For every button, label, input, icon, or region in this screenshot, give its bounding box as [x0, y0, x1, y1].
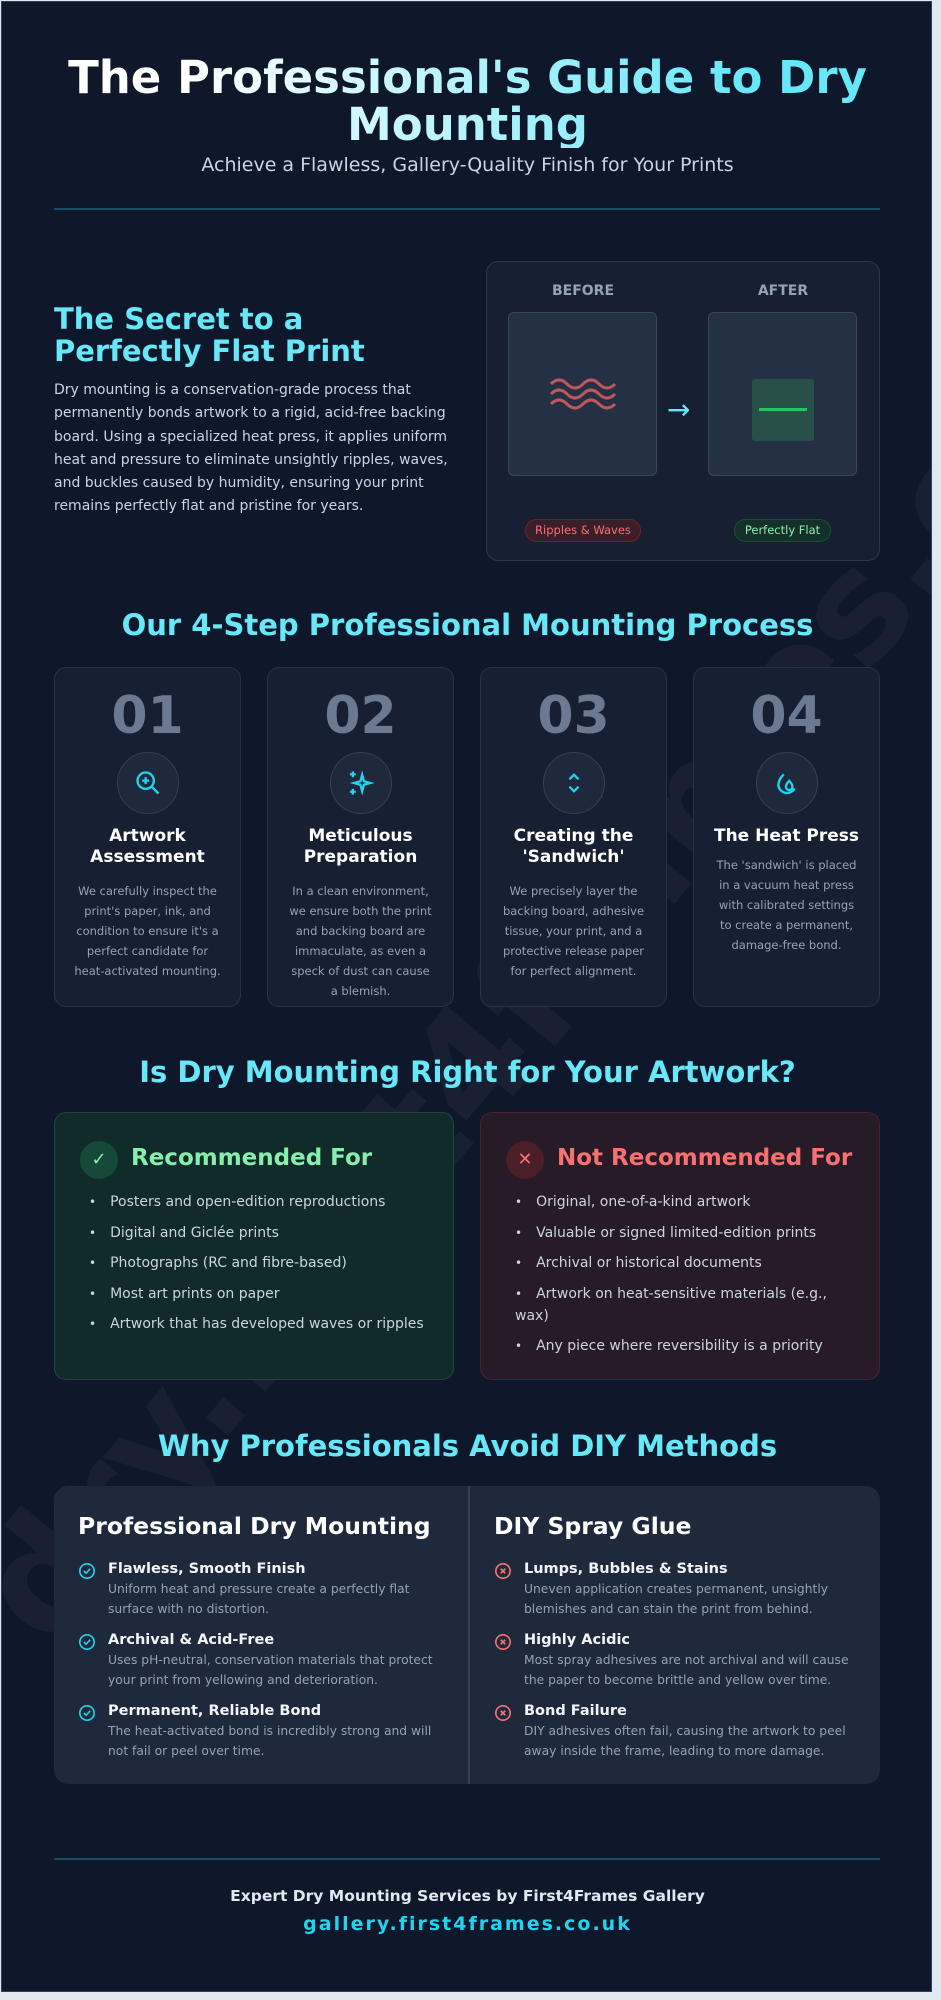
item: [495, 1632, 849, 1687]
intro paragraph: Dry mounting is a conservation-grade process that permanently bonds artwork to a rigid, acid-free backing board. Using a specialized heat press, it applies uniform heat and pressure to eliminate unsightly ripples, waves, and buckles caused by humidity, ensuring your print remains perfectly flat and pristine for years.: [54, 382, 448, 514]
heading: right for artwork: Is Dry Mounting Right for Your Artwork?: [139, 1055, 796, 1089]
step 3: Creating the: [514, 826, 633, 846]
pill before: Ripples & Waves: [535, 523, 631, 537]
title: The Professional's Guide to Dry: [68, 51, 867, 104]
list: Valuable or signed limited-edition prints: [536, 1224, 816, 1240]
panel: not recommended: [480, 1112, 880, 1380]
step 1: We carefully inspect the print's paper, ink, and condition to ensure it's a perfect candidate for heat-activated mounting.: [74, 884, 221, 978]
footer url: gallery.first4frames.co.uk: [303, 1913, 632, 1935]
icon: check: ✓: [91, 1149, 107, 1170]
step 4: The Heat Press: [714, 826, 859, 846]
icon: check: [80, 1141, 118, 1179]
title: Mounting: [347, 98, 588, 151]
heading: Recommended For: [131, 1145, 372, 1171]
step 3: [480, 667, 667, 1007]
icon: cross: [506, 1141, 544, 1179]
step 1: Artwork: [109, 826, 186, 846]
heading: secret: Perfectly Flat Print: [54, 334, 365, 368]
list: Digital and Giclée prints: [110, 1224, 279, 1240]
item: Most spray adhesives are not archival and will cause the paper to become brittle and yellow over time.: [524, 1653, 849, 1687]
step 3: We precisely layer the backing board, adhesive tissue, your print, and a protective release paper for perfect alignment.: [503, 884, 644, 978]
before print: [508, 312, 657, 476]
subtitle: Achieve a Flawless, Gallery-Quality Finish for Your Prints: [201, 154, 734, 176]
list: Artwork on heat-sensitive materials (e.g., wax): [515, 1286, 827, 1324]
step 2: 02: [324, 686, 397, 746]
item: DIY adhesives often fail, causing the artwork to peel away inside the frame, leading to more damage.: [524, 1724, 846, 1758]
item: [79, 1561, 410, 1616]
column: professional: [78, 1512, 433, 1758]
title: [2, 54, 933, 148]
icon: cross: ✕: [517, 1149, 533, 1170]
before/after panel: [486, 261, 880, 561]
item: The heat-activated bond is incredibly strong and will not fail or peel over time.: [108, 1724, 431, 1758]
list: Artwork that has developed waves or ripples: [110, 1316, 424, 1332]
item: Flawless, Smooth Finish: [108, 1561, 306, 1577]
step 1: Assessment: [90, 847, 205, 867]
item: Permanent, Reliable Bond: [108, 1703, 321, 1719]
list: Archival or historical documents: [536, 1255, 762, 1271]
column: DIY: DIY Spray Glue: [494, 1512, 691, 1540]
step 1: [54, 667, 241, 1007]
list: Any piece where reversibility is a priority: [536, 1338, 823, 1354]
item: Uses pH-neutral, conservation materials that protect your print from yellowing and deterioration.: [108, 1653, 433, 1687]
step 4: The 'sandwich' is placed in a vacuum heat press with calibrated settings to create a permanent, damage-free bond.: [717, 858, 856, 952]
heading: secret: The Secret to a: [54, 302, 303, 336]
step 2: Meticulous: [308, 826, 413, 846]
pill before: [525, 519, 641, 542]
step 1: 01: [111, 686, 184, 746]
panel: recommended: [54, 1112, 454, 1380]
item: Lumps, Bubbles & Stains: [524, 1561, 728, 1577]
list: Most art prints on paper: [110, 1286, 279, 1302]
step 2: Preparation: [304, 847, 417, 867]
heading: avoid DIY: Why Professionals Avoid DIY Methods: [158, 1429, 777, 1463]
item: [495, 1561, 828, 1616]
after print: [708, 312, 857, 476]
pill after: Perfectly Flat: [745, 523, 820, 537]
heading: process: Our 4-Step Professional Mounting Process: [122, 608, 813, 642]
item: Uniform heat and pressure create a perfectly flat surface with no distortion.: [108, 1582, 409, 1616]
item: [79, 1632, 433, 1687]
item: Bond Failure: [524, 1703, 627, 1719]
step 2: In a clean environment, we ensure both the print and backing board are immaculate, as even a speck of dust can cause a blemish.: [289, 884, 432, 998]
column: DIY: [494, 1512, 849, 1758]
step 3: 03: [537, 686, 610, 746]
list: Original, one-of-a-kind artwork: [536, 1194, 750, 1210]
column: professional: Professional Dry Mounting: [78, 1512, 431, 1540]
item: [79, 1703, 431, 1758]
pill after: [734, 519, 831, 542]
list: [90, 1194, 424, 1332]
list: Photographs (RC and fibre-based): [110, 1255, 347, 1271]
after label: AFTER: [758, 283, 808, 299]
heading: Not Recommended For: [557, 1145, 852, 1171]
item: Uneven application creates permanent, unsightly blemishes and can stain the print from behind.: [524, 1582, 828, 1616]
step 4: 04: [750, 686, 823, 746]
before label: BEFORE: [552, 283, 614, 299]
heading: secret: [54, 302, 365, 368]
list: Posters and open-edition reproductions: [110, 1194, 385, 1210]
footer text: Expert Dry Mounting Services by First4Frames Gallery: [230, 1887, 705, 1905]
item: Archival & Acid-Free: [108, 1632, 274, 1648]
list: [515, 1194, 827, 1354]
comparison panel: [54, 1486, 880, 1784]
arrow: →: [667, 393, 690, 426]
item: Highly Acidic: [524, 1632, 630, 1648]
step 2: [267, 667, 454, 1007]
step 3: 'Sandwich': [522, 847, 625, 867]
item: [495, 1703, 846, 1758]
step 4: [693, 667, 880, 1007]
